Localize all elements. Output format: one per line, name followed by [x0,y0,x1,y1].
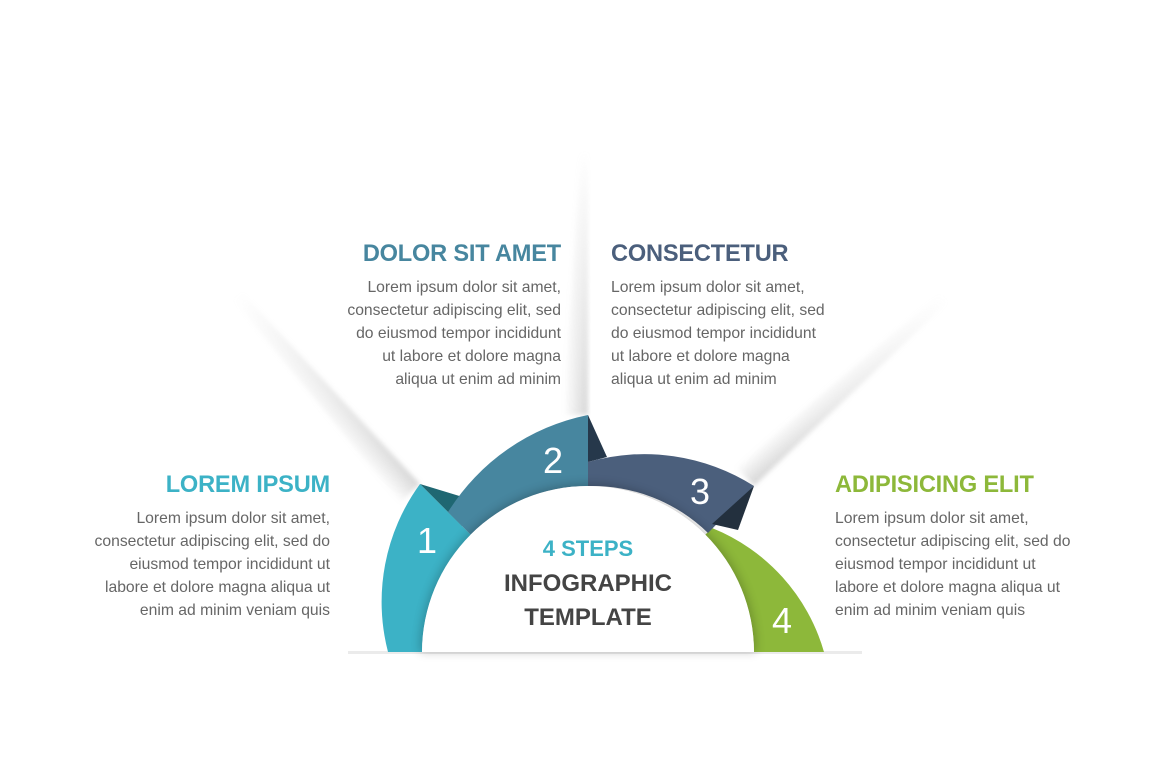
step 3 text [611,241,825,388]
numbers: 1 [417,520,437,561]
step 1 text: Lorem ipsum dolor sit amet, [136,510,330,527]
step 2 text: ut labore et dolore magna [382,348,561,365]
center text: 4 STEPS [543,536,633,561]
step 3 text: aliqua ut enim ad minim [611,371,777,388]
step 1 text: enim ad minim veniam quis [140,602,330,619]
step 4 text: enim ad minim veniam quis [835,602,1025,619]
step 3 text: Lorem ipsum dolor sit amet, [611,279,805,296]
step 2 text: Lorem ipsum dolor sit amet, [367,279,561,296]
step 3 text: do eiusmod tempor incididunt [611,325,816,342]
step 2 text: DOLOR SIT AMET [363,241,561,267]
numbers: 3 [690,471,710,512]
step 4 text: eiusmod tempor incididunt ut [835,556,1036,573]
step 1 text: consectetur adipiscing elit, sed do [95,533,330,550]
step 4 text: Lorem ipsum dolor sit amet, [835,510,1029,527]
step 1 text: eiusmod tempor incididunt ut [129,556,330,573]
step 4 text: ADIPISICING ELIT [835,472,1034,498]
step 2 text: aliqua ut enim ad minim [395,371,561,388]
center text: INFOGRAPHIC [504,570,672,597]
step 2 text: do eiusmod tempor incididunt [356,325,561,342]
step 4 text [835,472,1070,619]
segment 1 [382,484,471,652]
diagram [274,214,900,657]
step 2 text [347,241,561,388]
step 1 text: labore et dolore magna aliqua ut [105,579,330,596]
shadow ray 3 [742,342,900,486]
numbers: 2 [543,440,563,481]
shadow ray 2 [569,214,590,416]
step 1 text [95,472,330,619]
step 1 text: LOREM IPSUM [166,472,330,498]
segment 4 [705,528,824,652]
segment 3 [588,454,754,533]
step 3 text: CONSECTETUR [611,241,788,267]
numbers: 4 [772,600,792,641]
shadow ray 1 [274,334,420,497]
center text: TEMPLATE [524,604,652,631]
step 3 text: consectetur adipiscing elit, sed [611,302,825,319]
numbers [417,440,792,641]
step 3 text: ut labore et dolore magna [611,348,790,365]
step 2 text: consectetur adipiscing elit, sed [347,302,561,319]
step 4 text: labore et dolore magna aliqua ut [835,579,1060,596]
baseline [348,651,862,654]
step 4 text: consectetur adipiscing elit, sed do [835,533,1070,550]
segment 2 [448,415,607,535]
center circle [420,484,756,652]
center text [504,536,672,631]
